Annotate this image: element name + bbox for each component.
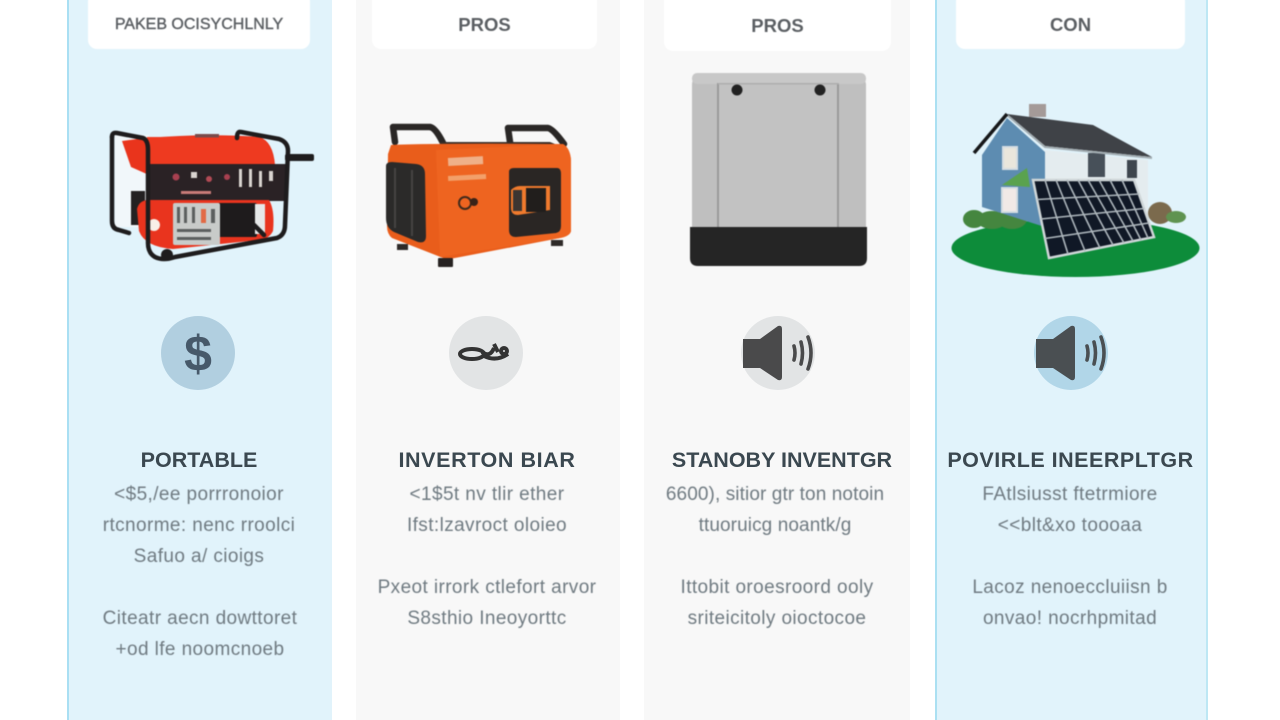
text block: standby pros <box>666 484 884 536</box>
text block: inverter cons: S8sthio Ineoyorttc <box>407 608 567 629</box>
text block: portable pros <box>103 484 295 567</box>
text block: solar cons: onvao! nocrhpmitad <box>983 608 1157 629</box>
illustration: orange inverter generator <box>385 122 572 268</box>
text block: portable pros: <$5,/ee porrronoior <box>114 484 284 505</box>
header: con label: CON <box>1050 14 1091 35</box>
panel: solar inverter <box>935 0 1208 720</box>
heading: standby: STANOBY INVENTGR <box>672 448 892 472</box>
text block: inverter pros <box>407 484 567 536</box>
text block: solar pros: <<blt&xo toooaa <box>998 515 1142 536</box>
heading: inverter: INVERTON BIAR <box>398 448 576 472</box>
header: portable label: PAKEB OCISYCHLNLY <box>115 16 283 33</box>
icon: wrench and cord <box>449 316 523 390</box>
text block: standby pros: 6600), sitior gtr ton notoin <box>666 484 884 505</box>
heading: portable inverter: POVIRLE INEERPLTGR <box>947 448 1194 472</box>
heading: portable: PORTABLE <box>141 448 257 472</box>
text block: solar cons: Lacoz nenoeccluiisn b <box>972 577 1168 598</box>
illustration: standby generator unit <box>689 72 868 267</box>
illustration: red portable generator <box>108 128 315 262</box>
header: con label <box>956 0 1185 49</box>
header: portable label <box>88 0 310 49</box>
icon: speaker <box>1034 316 1108 390</box>
header: pros label <box>372 0 597 49</box>
text block: portable cons: Citeatr aecn dowttoret <box>103 608 297 629</box>
text block: inverter cons <box>378 577 596 629</box>
header: pros label: PROS <box>458 14 511 35</box>
text block: portable cons <box>102 608 298 660</box>
icon: speaker <box>741 316 815 390</box>
text block: standby pros: ttuoruicg noantk/g <box>699 515 851 536</box>
header: pros label: PROS <box>751 15 804 36</box>
text block: portable pros: Safuo a/ cioigs <box>134 546 264 567</box>
text block: inverter pros: Ifst:lzavroct oloieo <box>407 515 567 536</box>
text block: inverter cons: Pxeot irrork ctlefort arvor <box>378 577 596 598</box>
text block: inverter pros: <1$5t nv tlir ether <box>410 484 564 505</box>
text block: solar cons <box>972 577 1168 629</box>
illustration: house with solar panels <box>950 104 1200 278</box>
text block: standby cons: Ittobit oroesroord ooly <box>681 577 873 598</box>
panel: standby generator <box>644 0 910 720</box>
text block: standby cons: sriteicitoly oioctocoe <box>688 608 866 629</box>
icon: dollar sign: $ <box>184 326 212 382</box>
panel: inverter generator <box>356 0 620 720</box>
text block: solar pros: FAtlsiusst ftetrmiore <box>982 484 1158 505</box>
panel: portable generator <box>67 0 332 720</box>
text block: solar pros <box>982 484 1158 536</box>
header: pros label <box>664 0 891 51</box>
text block: standby cons <box>681 577 874 629</box>
text block: portable pros: rtcnorme: nenc rroolci <box>103 515 295 536</box>
text block: portable cons: +od lfe noomcnoeb <box>116 639 284 660</box>
icon: dollar sign <box>161 316 235 390</box>
